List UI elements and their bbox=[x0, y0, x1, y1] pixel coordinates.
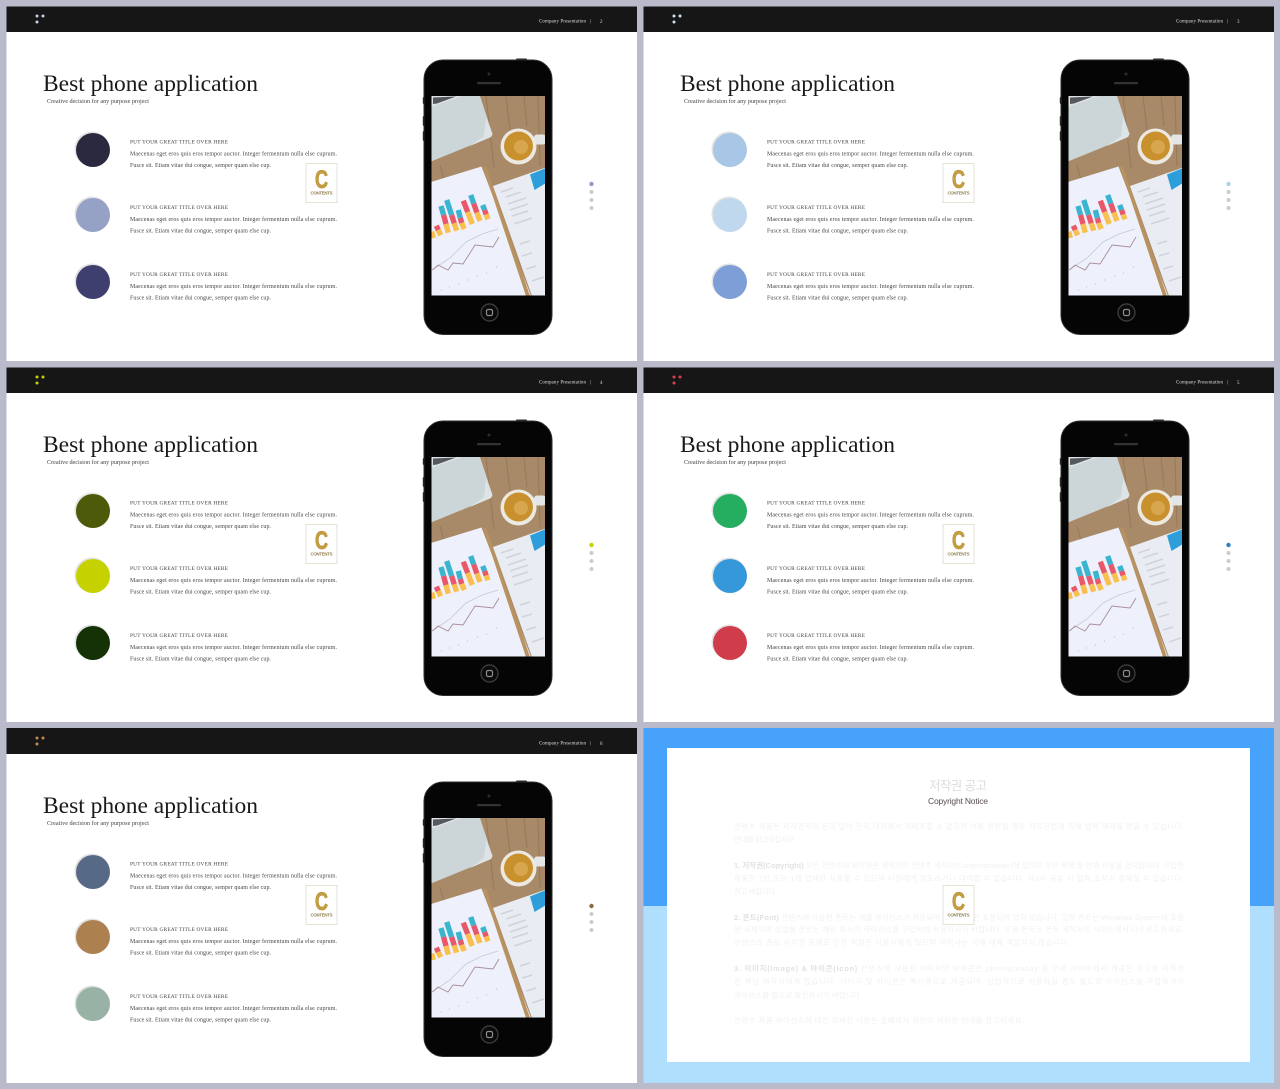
item 3 bbox=[712, 264, 975, 302]
subtitle: Creative decision for any purpose project bbox=[684, 98, 786, 105]
item 3: PUT YOUR GREAT TITLE OVER HERE bbox=[130, 994, 229, 1000]
item 2: Maecenas eget eros quis eros tempor auctor. Integer fermentum nulla else cuprum. bbox=[130, 577, 338, 584]
pagination dots bbox=[589, 904, 594, 932]
item 2: Fusce sit. Etiam vitae dui congue, semper quam else cup. bbox=[130, 590, 272, 596]
logo badge: C bbox=[952, 527, 965, 555]
title: Best phone application bbox=[43, 432, 258, 458]
item 3: Maecenas eget eros quis eros tempor auctor. Integer fermentum nulla else cuprum. bbox=[767, 283, 975, 290]
paragraph 1: 참고 바랍니다. bbox=[734, 886, 777, 896]
item 1: Fusce sit. Etiam vitae dui congue, semper quam else cup. bbox=[767, 524, 909, 530]
item 3 bbox=[74, 264, 338, 302]
item 3: Maecenas eget eros quis eros tempor auctor. Integer fermentum nulla else cuprum. bbox=[130, 644, 338, 651]
subtitle: Creative decision for any purpose project bbox=[47, 98, 149, 105]
paragraph 3 bbox=[734, 963, 1184, 1000]
item 3: PUT YOUR GREAT TITLE OVER HERE bbox=[130, 633, 229, 639]
paragraph 2: 된 서체이며 상업용 폰트는 해당 회사의 라이선스를 구입하여 사용하시기 바랍니다. 무료 폰트는 폰트 제작사의 사이트에서 다운로드하세요. bbox=[734, 924, 1184, 934]
logo badge: CONTENTS bbox=[310, 552, 333, 556]
item 2: PUT YOUR GREAT TITLE OVER HERE bbox=[130, 927, 229, 933]
item 2: Fusce sit. Etiam vitae dui congue, semper quam else cup. bbox=[130, 228, 272, 234]
item 3: Fusce sit. Etiam vitae dui congue, semper quam else cup. bbox=[767, 296, 909, 302]
logo badge: CONTENTS bbox=[310, 190, 333, 196]
slide 5 bbox=[6, 728, 637, 1083]
paragraph 3: 은 해당 제작자에게 있습니다. 이미지 및 아이콘은 예시용으로 제공되며, 상업적으로 사용하실 경우 별도의 라이선스를 구입하셔야 bbox=[734, 976, 1184, 986]
item 1: Maecenas eget eros quis eros tempor auctor. Integer fermentum nulla else cuprum. bbox=[130, 872, 338, 880]
item 1: Fusce sit. Etiam vitae dui congue, semper quam else cup. bbox=[130, 885, 272, 891]
paragraph 2: 2. 폰트(Font) 컨텐츠에 사용된 폰트는 개별 라이선스가 적용되며 폰트 파일은 포함되어 있지 않습니다. 일부 폰트는 Windows System에 포함 bbox=[734, 912, 1184, 922]
logo badge: CONTENTS bbox=[948, 552, 970, 556]
header bar: | bbox=[1227, 380, 1228, 386]
item 2 bbox=[74, 918, 338, 956]
header bar bbox=[6, 368, 637, 393]
logo badge bbox=[306, 164, 337, 202]
item 1: Maecenas eget eros quis eros tempor auctor. Integer fermentum nulla else cuprum. bbox=[767, 512, 975, 518]
item 1 bbox=[74, 492, 338, 530]
header bar: 3 bbox=[1237, 20, 1240, 25]
logo badge bbox=[306, 524, 337, 564]
item 3: Fusce sit. Etiam vitae dui congue, semper quam else cup. bbox=[130, 296, 272, 302]
subtitle: Creative decision for any purpose project bbox=[47, 459, 149, 466]
slide 6: copyright notice bbox=[644, 728, 1274, 1083]
item 1: PUT YOUR GREAT TITLE OVER HERE bbox=[130, 500, 229, 506]
paragraph 1: 1. 저작권(Copyright) 모든 컨텐츠의 저작권은 제작자인 컨텐츠 제작사(Contentsmaster)에 있으며 무단 복제 및 변경 사용을 금지합니다. 구입한 bbox=[734, 860, 1184, 870]
paragraph 1: 제품은 1인 또는 1개 업체만 사용할 수 있으며 타인에게 양도하거나 대여할 수 없습니다. 제3자 공유 시 법적 조치가 취해질 수 있습니다. bbox=[734, 873, 1184, 883]
notice title: 저작권 공고 bbox=[929, 779, 987, 793]
icon: logo dots bbox=[36, 14, 44, 24]
item 1 bbox=[712, 132, 975, 169]
item 2: PUT YOUR GREAT TITLE OVER HERE bbox=[767, 205, 866, 211]
slide panel bbox=[6, 754, 637, 1083]
item 3: Maecenas eget eros quis eros tempor auctor. Integer fermentum nulla else cuprum. bbox=[130, 283, 338, 290]
header bar: | bbox=[590, 20, 591, 24]
header bar bbox=[644, 6, 1274, 32]
logo badge: C bbox=[315, 527, 328, 555]
item 2: Fusce sit. Etiam vitae dui congue, semper quam else cup. bbox=[130, 950, 272, 956]
logo badge bbox=[943, 524, 974, 564]
paragraph 3: 라이선스를 별도로 확인하시기 바랍니다. bbox=[734, 990, 862, 1000]
logo badge bbox=[943, 886, 974, 924]
intro paragraph: 컨텐츠 제품은 저작권자의 동의 없이 한국 내외에서 재배포할 수 없으며 이를 위반할 경우 저작권법에 의해 법적 제재를 받을 수 있습니다. bbox=[734, 821, 1184, 831]
item 1 bbox=[74, 132, 338, 169]
item 1 bbox=[712, 492, 975, 530]
pagination dots bbox=[1226, 543, 1231, 571]
item 1: Maecenas eget eros quis eros tempor auctor. Integer fermentum nulla else cuprum. bbox=[130, 150, 338, 158]
header bar: Company Presentation bbox=[539, 20, 586, 24]
intro paragraph: 안내를 참고하십시오. bbox=[734, 834, 796, 844]
slide panel bbox=[6, 32, 637, 361]
white notice card bbox=[667, 748, 1250, 1062]
phone mockup bbox=[1060, 420, 1189, 696]
item 2: Fusce sit. Etiam vitae dui congue, semper quam else cup. bbox=[767, 590, 909, 596]
icon: logo dots bbox=[672, 376, 682, 384]
icon: logo dots bbox=[36, 376, 44, 384]
pagination dots bbox=[589, 182, 594, 210]
slide 3 bbox=[6, 368, 637, 722]
item 3: Fusce sit. Etiam vitae dui congue, semper quam else cup. bbox=[130, 656, 272, 662]
item 1: PUT YOUR GREAT TITLE OVER HERE bbox=[130, 140, 229, 146]
item 1: Maecenas eget eros quis eros tempor auctor. Integer fermentum nulla else cuprum. bbox=[130, 512, 338, 518]
item 1: Fusce sit. Etiam vitae dui congue, semper quam else cup. bbox=[767, 163, 909, 169]
logo badge: C bbox=[952, 166, 965, 194]
header bar: 4 bbox=[600, 381, 603, 386]
item 3 bbox=[712, 624, 975, 662]
item 1: PUT YOUR GREAT TITLE OVER HERE bbox=[767, 500, 866, 506]
item 3 bbox=[74, 624, 338, 662]
item 3: PUT YOUR GREAT TITLE OVER HERE bbox=[130, 272, 229, 278]
header bar bbox=[6, 728, 637, 754]
header bar: | bbox=[590, 742, 591, 746]
item 3 bbox=[74, 986, 338, 1024]
item 1: PUT YOUR GREAT TITLE OVER HERE bbox=[130, 862, 229, 868]
icon: logo dots bbox=[672, 14, 682, 24]
slide 2 bbox=[644, 6, 1274, 361]
header bar: Company Presentation bbox=[539, 742, 586, 746]
header bar: 5 bbox=[1237, 381, 1240, 386]
slide 4 bbox=[644, 368, 1274, 722]
phone mockup bbox=[1060, 58, 1189, 334]
item 2: PUT YOUR GREAT TITLE OVER HERE bbox=[130, 205, 229, 211]
item 1 bbox=[74, 854, 338, 891]
item 2 bbox=[74, 558, 338, 596]
header bar: | bbox=[1227, 20, 1228, 24]
slide panel bbox=[644, 393, 1274, 722]
title: Best phone application bbox=[43, 71, 258, 97]
phone mockup bbox=[423, 58, 552, 334]
phone mockup bbox=[423, 780, 552, 1056]
item 2 bbox=[712, 558, 975, 596]
item 2: Maecenas eget eros quis eros tempor auctor. Integer fermentum nulla else cuprum. bbox=[767, 216, 975, 223]
item 3: PUT YOUR GREAT TITLE OVER HERE bbox=[767, 633, 866, 639]
paragraph 3: 3. 이미지(Image) & 아이콘(Icon) 컨텐츠에 사용된 이미지와 아이콘은 photopixabay 등 무료 사이트에서 제공된 것으로 저작권 bbox=[734, 963, 1184, 973]
pagination dots bbox=[1226, 182, 1231, 210]
item 3: Maecenas eget eros quis eros tempor auctor. Integer fermentum nulla else cuprum. bbox=[767, 644, 975, 651]
notice subtitle: Copyright Notice bbox=[928, 796, 988, 806]
logo badge: C bbox=[315, 888, 328, 916]
paragraph 1 bbox=[734, 860, 1184, 896]
icon: logo dots bbox=[36, 736, 44, 746]
item 3: Maecenas eget eros quis eros tempor auctor. Integer fermentum nulla else cuprum. bbox=[130, 1005, 338, 1012]
blue background top bbox=[644, 728, 1274, 906]
intro paragraph bbox=[734, 821, 1184, 844]
header bar: Company Presentation bbox=[1176, 380, 1224, 386]
item 1: Fusce sit. Etiam vitae dui congue, semper quam else cup. bbox=[130, 163, 272, 169]
paragraph 2 bbox=[734, 912, 1184, 947]
header bar: 6 bbox=[600, 742, 603, 747]
title: Best phone application bbox=[680, 432, 895, 458]
closing paragraph: 컨텐츠 제품 라이선스에 대한 자세한 사항은 홈페이지 하단의 저작권 안내를 참고하세요. bbox=[734, 1015, 1024, 1025]
item 3: PUT YOUR GREAT TITLE OVER HERE bbox=[767, 272, 866, 278]
logo badge bbox=[943, 164, 974, 202]
title: Best phone application bbox=[43, 793, 258, 819]
item 2: Maecenas eget eros quis eros tempor auctor. Integer fermentum nulla else cuprum. bbox=[130, 216, 338, 223]
item 1: Maecenas eget eros quis eros tempor auctor. Integer fermentum nulla else cuprum. bbox=[767, 150, 975, 158]
logo badge: CONTENTS bbox=[948, 912, 970, 918]
item 3: Fusce sit. Etiam vitae dui congue, semper quam else cup. bbox=[130, 1018, 272, 1024]
item 2: Fusce sit. Etiam vitae dui congue, semper quam else cup. bbox=[767, 228, 909, 234]
slide 1 bbox=[6, 6, 637, 361]
pagination dots bbox=[589, 543, 594, 571]
logo badge: C bbox=[952, 888, 965, 916]
subtitle: Creative decision for any purpose project bbox=[684, 459, 786, 466]
logo badge: CONTENTS bbox=[948, 190, 970, 196]
header bar: 2 bbox=[600, 20, 603, 25]
phone mockup bbox=[423, 420, 552, 696]
logo badge bbox=[306, 886, 337, 924]
title: Best phone application bbox=[680, 71, 895, 97]
slide panel bbox=[644, 32, 1274, 361]
item 2: PUT YOUR GREAT TITLE OVER HERE bbox=[130, 566, 229, 572]
header bar bbox=[6, 6, 637, 32]
item 2: Maecenas eget eros quis eros tempor auctor. Integer fermentum nulla else cuprum. bbox=[130, 938, 338, 945]
item 1: PUT YOUR GREAT TITLE OVER HERE bbox=[767, 140, 866, 146]
subtitle: Creative decision for any purpose project bbox=[47, 820, 149, 827]
slide panel bbox=[6, 393, 637, 722]
paragraph 2: 컨텐츠의 폰트 저작권 문제로 인한 책임은 사용자에게 있으며 제작사는 이에 대해 책임지지 않습니다. bbox=[734, 937, 1070, 947]
logo badge: C bbox=[315, 166, 328, 194]
item 2 bbox=[74, 196, 338, 234]
header bar bbox=[644, 368, 1274, 393]
item 2 bbox=[712, 196, 975, 234]
item 3: Fusce sit. Etiam vitae dui congue, semper quam else cup. bbox=[767, 656, 909, 662]
header bar: Company Presentation bbox=[539, 380, 586, 386]
header bar: | bbox=[590, 380, 591, 386]
item 2: Maecenas eget eros quis eros tempor auctor. Integer fermentum nulla else cuprum. bbox=[767, 577, 975, 584]
logo badge: CONTENTS bbox=[310, 912, 333, 918]
header bar: Company Presentation bbox=[1176, 20, 1224, 24]
item 2: PUT YOUR GREAT TITLE OVER HERE bbox=[767, 566, 866, 572]
item 1: Fusce sit. Etiam vitae dui congue, semper quam else cup. bbox=[130, 524, 272, 530]
light blue background bottom bbox=[644, 906, 1274, 1083]
